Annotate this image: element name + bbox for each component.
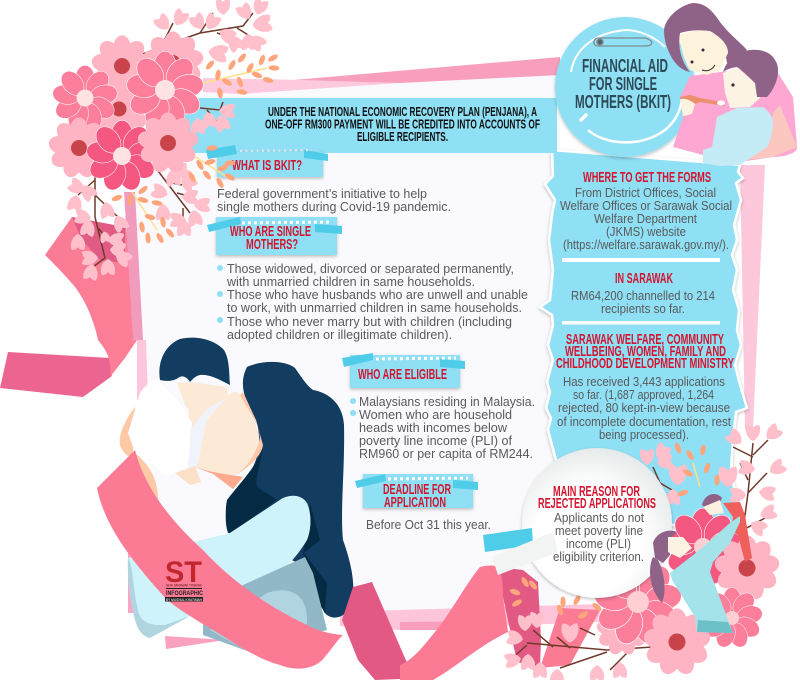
list: who are single mothers: adopted children or illegitimate children).	[227, 327, 452, 342]
heading tag: who are eligible	[342, 353, 465, 388]
tape on circle	[483, 528, 558, 575]
heading tag: who are single mothers: WHO ARE SINGLE	[230, 223, 311, 240]
section: in Sarawak: RM64,200 channelled to 214	[571, 288, 715, 303]
baby face	[177, 382, 228, 418]
list: who are single mothers: with unmarried children in same households.	[226, 274, 475, 289]
title badge	[555, 17, 695, 157]
section: where to get the forms: (https://welfare.sarawak.gov.my/).	[563, 237, 729, 252]
logo: ST infographic: BY MUSNUL KHATIMAH	[166, 598, 202, 602]
baby hair	[159, 338, 230, 385]
rejected applications circle: MAIN REASON FOR	[553, 483, 640, 500]
rejected applications circle: Applicants do not	[554, 510, 644, 525]
heading tag: deadline: APPLICATION	[384, 494, 446, 511]
title badge: FOR SINGLE	[589, 74, 657, 94]
list: who are eligible: Malaysians residing in Malaysia.	[359, 394, 535, 409]
mother's face	[188, 383, 259, 476]
mother's shirt	[128, 496, 310, 638]
top-left flowers	[47, 31, 205, 193]
header banner: ELIGIBLE RECIPIENTS.	[357, 129, 448, 144]
section: ministry	[556, 331, 734, 442]
logo: ST infographic: ST	[165, 556, 202, 589]
title badge: FINANCIAL AID	[582, 56, 668, 76]
list: who are single mothers	[217, 261, 528, 342]
neck shadow	[195, 467, 243, 489]
list: who are eligible	[350, 394, 535, 461]
baby body	[128, 380, 192, 476]
logo: ST infographic: INFOGRAPHIC	[166, 591, 204, 597]
section: ministry: of incomplete documentation, rest	[557, 414, 731, 429]
list: who are single mothers: to work, with unmarried children in same households.	[227, 300, 522, 315]
heading tag: who are single mothers	[207, 217, 342, 255]
heading tag: who are eligible: WHO ARE ELIGIBLE	[358, 366, 447, 383]
heading tag: deadline	[355, 474, 478, 511]
ribbon: big swoosh	[97, 450, 600, 680]
list: who are eligible: poverty line income (PLI) of	[359, 433, 512, 448]
list: who are single mothers: Those widowed, divorced or separated permanently,	[227, 261, 514, 276]
heading tag: who are single mothers: MOTHERS?	[246, 236, 298, 253]
rejected applications circle: meet poverty line	[555, 523, 643, 538]
section: ministry: Has received 3,443 applications	[563, 374, 725, 389]
header banner: UNDER THE NATIONAL ECONOMIC RECOVERY PLAN (PENJANA), A	[268, 104, 537, 119]
text: what is BKIT	[217, 186, 451, 214]
list: who are single mothers: Those who never marry but with children (including	[227, 314, 512, 329]
text: what is BKIT: Federal government’s initiative to help	[217, 186, 427, 201]
list: who are single mothers: Those who have husbands who are unwell and unable	[227, 287, 528, 302]
section: where to get the forms: Welfare Offices or Sarawak Social	[560, 198, 732, 213]
header banner	[185, 98, 557, 153]
rejected applications circle: income (PLI)	[566, 536, 631, 551]
mother's hair	[226, 362, 353, 618]
illustration: mother feeding child	[664, 3, 797, 166]
list: who are eligible: Women who are household	[359, 407, 512, 422]
heading tag: deadline: DEADLINE FOR	[383, 481, 451, 498]
mother's darker hair	[226, 447, 327, 613]
section: where to get the forms: From District Offices, Social	[575, 185, 716, 200]
logo: ST infographic: NEW SARAWAK TRIBUNE	[166, 584, 203, 588]
section: where to get the forms	[560, 169, 732, 262]
section: where to get the forms: (JKMS) website	[606, 224, 686, 239]
bottom-right flowers	[593, 508, 781, 677]
top-left branches	[67, 0, 280, 281]
rejected applications circle: REJECTED APPLICATIONS	[538, 495, 656, 512]
section: in Sarawak: IN SARAWAK	[615, 270, 673, 287]
heading tag: what is BKIT: WHAT IS BKIT?	[232, 157, 302, 174]
section: where to get the forms: WHERE TO GET THE FORMS	[583, 169, 711, 186]
illustration: mother and baby	[120, 338, 353, 651]
mother's arm	[135, 453, 158, 500]
paper page	[130, 74, 560, 640]
text: deadline: Before Oct 31 this year.	[366, 517, 491, 532]
icon: safety pin	[594, 38, 652, 46]
section: in Sarawak: recipients so far.	[601, 301, 685, 316]
blue torn panel	[540, 150, 747, 525]
rejected applications circle	[522, 448, 672, 598]
bottom-right branches	[504, 422, 787, 680]
section: ministry: rejected, 80 kept-in-view because	[558, 400, 730, 415]
section: ministry: being processed).	[599, 427, 689, 442]
list: who are eligible: RM960 or per capita of RM244.	[359, 446, 533, 461]
header banner: ONE-OFF RM300 PAYMENT WILL BE CREDITED INTO ACCOUNTS OF	[265, 116, 540, 132]
section: where to get the forms: Welfare Department	[594, 211, 697, 226]
title badge: MOTHERS (BKIT)	[575, 92, 671, 112]
rejected applications circle: eligibility criterion.	[553, 549, 644, 564]
illustration: mother lifting baby	[650, 494, 752, 633]
text: what is BKIT: single mothers during Covid-19 pandemic.	[217, 199, 451, 214]
frame strips	[124, 57, 765, 649]
section: ministry: so far. (1,687 approved, 1,264	[573, 387, 714, 402]
heading tag: what is BKIT	[206, 145, 328, 177]
section: in Sarawak	[562, 270, 720, 324]
ribbon: upper left	[0, 217, 137, 397]
list: who are eligible: heads with incomes below	[359, 420, 508, 435]
